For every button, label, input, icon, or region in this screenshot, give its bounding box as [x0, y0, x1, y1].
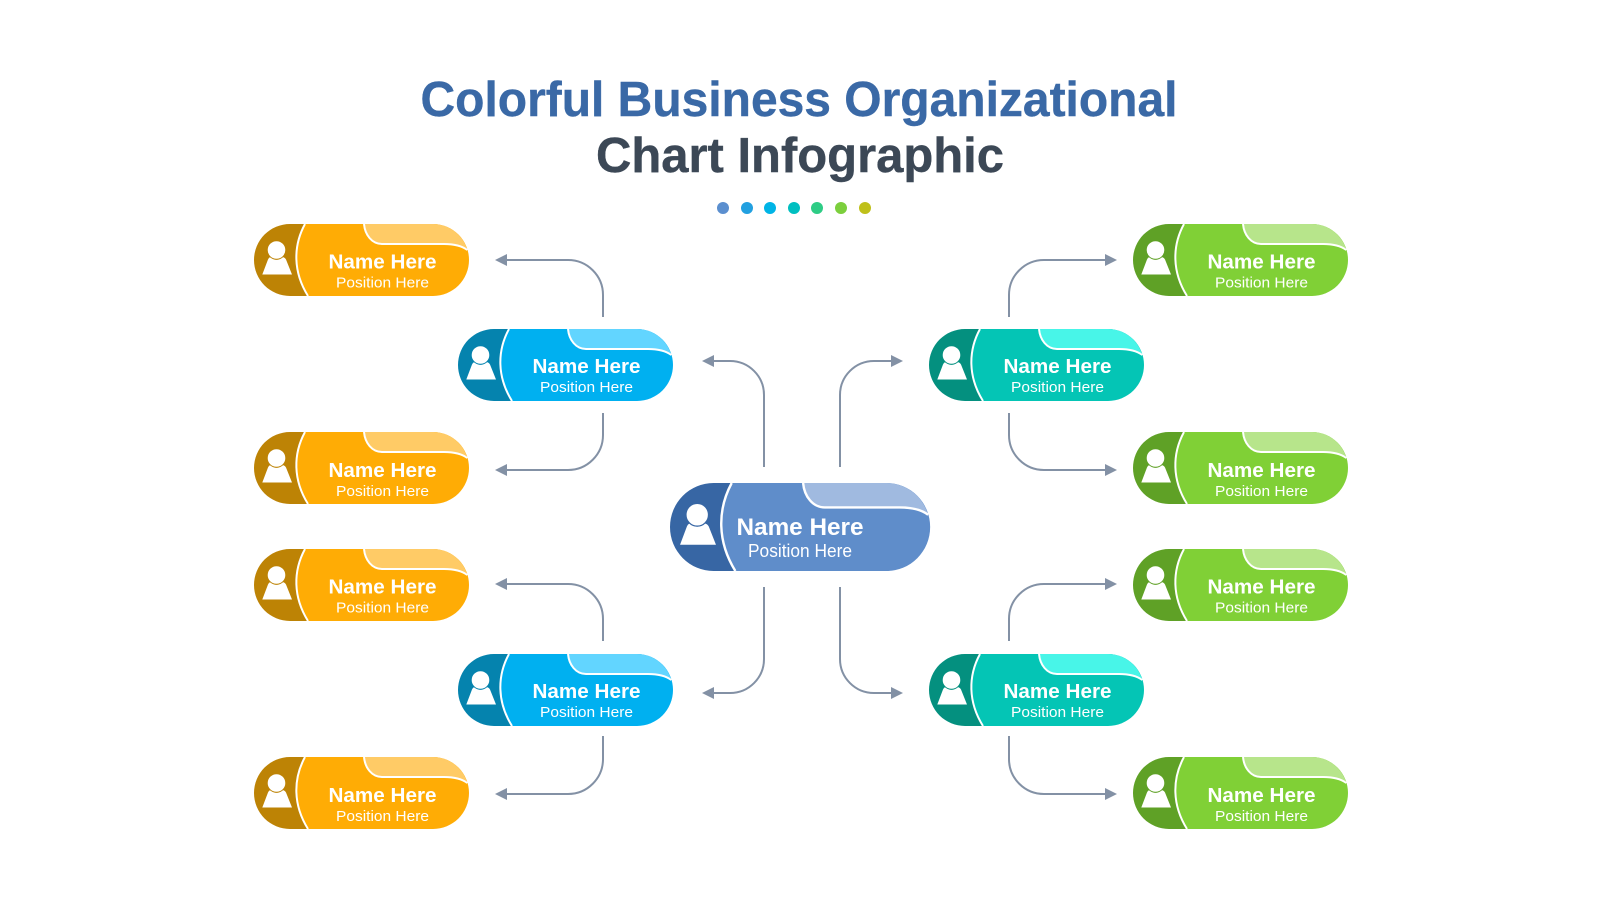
decorative dots row	[717, 202, 871, 214]
panel: orange node 4: Position Here	[336, 808, 429, 825]
panel: green node 2: Name Here	[1208, 460, 1316, 482]
arrow: teal top to green 2	[1009, 413, 1117, 476]
panel: blue node top: Position Here	[540, 379, 633, 396]
panel: orange node 1: Position Here	[336, 274, 429, 292]
panel: orange node 2	[254, 432, 469, 504]
arrow: center to blue top	[702, 355, 764, 467]
panel: center node: Name Here	[736, 514, 864, 541]
panel: teal node bottom	[929, 654, 1144, 726]
panel: green node 3	[1133, 549, 1348, 621]
arrow: blue bottom to orange 4	[495, 736, 603, 800]
panel: green node 4: Position Here	[1215, 808, 1308, 825]
title	[420, 72, 1178, 183]
panel: green node 3: Name Here	[1208, 576, 1316, 598]
arrow: teal bottom to green 4	[1009, 736, 1117, 800]
arrow: center to teal top	[840, 355, 903, 467]
panel: orange node 2: Name Here	[328, 460, 436, 482]
panel: green node 2: Position Here	[1215, 483, 1308, 500]
arrow: blue top to orange 1	[495, 254, 603, 317]
panel: teal node top: Name Here	[1004, 356, 1112, 378]
panel: green node 4: Name Here	[1208, 785, 1316, 807]
arrow: blue bottom to orange 3	[495, 578, 603, 641]
panel: green node 1: Name Here	[1208, 252, 1316, 274]
panel: orange node 4: Name Here	[328, 785, 436, 807]
panel: blue node bottom: Name Here	[532, 681, 640, 703]
panel: teal node top: Position Here	[1011, 379, 1104, 396]
panel: orange node 3: Position Here	[336, 600, 429, 616]
panel: green node 1: Position Here	[1215, 274, 1308, 292]
panel: blue node bottom	[458, 654, 673, 726]
panel: orange node 1	[254, 224, 469, 296]
arrow: blue top to orange 2	[495, 413, 603, 476]
panel: green node 2	[1133, 432, 1348, 504]
panel: orange node 3: Name Here	[328, 576, 436, 598]
panel: green node 4	[1133, 757, 1348, 829]
panel: teal node bottom: Position Here	[1011, 704, 1104, 721]
panel: blue node top	[458, 329, 673, 401]
panel: orange node 1: Name Here	[328, 252, 436, 274]
panel: green node 1	[1133, 224, 1348, 296]
panel: green node 3: Position Here	[1215, 600, 1308, 616]
panel: orange node 2: Position Here	[336, 483, 429, 500]
panel: blue node bottom: Position Here	[540, 704, 633, 721]
arrow: teal bottom to green 3	[1009, 578, 1117, 641]
panel: orange node 3	[254, 549, 469, 621]
panel: blue node top: Name Here	[532, 356, 640, 378]
panel: teal node bottom: Name Here	[1004, 681, 1112, 703]
panel: center node: Position Here	[748, 541, 852, 561]
panel: center node	[670, 483, 930, 571]
arrow: center to teal bottom	[840, 587, 903, 699]
arrow: center to blue bottom	[702, 587, 764, 699]
panel: teal node top	[929, 329, 1144, 401]
title: Colorful Business Organizational	[420, 72, 1178, 127]
panel: orange node 4	[254, 757, 469, 829]
arrow: teal top to green 1	[1009, 254, 1117, 317]
title: Chart Infographic	[596, 128, 1004, 183]
